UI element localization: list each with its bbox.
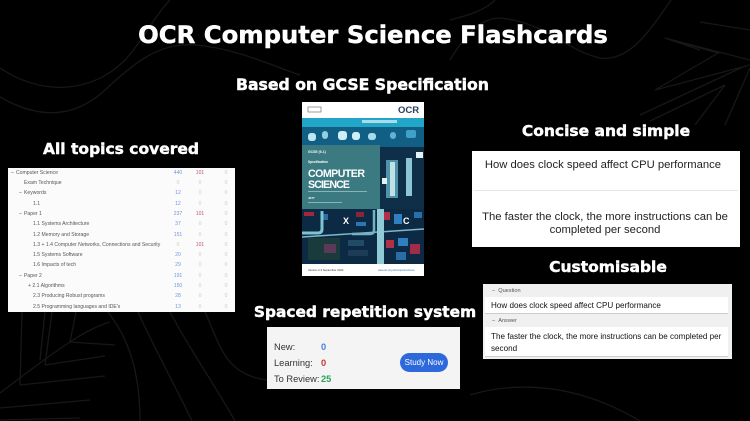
card question: How does clock speed affect CPU performance bbox=[485, 159, 721, 171]
panel: specification cover bbox=[302, 102, 424, 276]
card answer bbox=[482, 211, 728, 236]
cover text: GCSE (9-1) bbox=[308, 150, 326, 154]
row: 1.1 Systems Architecture: 37 bbox=[175, 221, 181, 227]
title: OCR Computer Science Flashcards bbox=[138, 20, 608, 49]
footer text: Version 2.3 September 2024 bbox=[308, 268, 344, 272]
row: Computer Science bbox=[11, 170, 228, 176]
row: 1.6 Impacts of tech: 29 bbox=[175, 262, 181, 268]
row: Paper 1: 0 bbox=[225, 211, 227, 217]
row: 1.1 Systems Architecture bbox=[33, 221, 228, 227]
row: Paper 1: Paper 1 bbox=[24, 211, 42, 217]
row: 2.1 Algorithms: 0 bbox=[225, 283, 227, 289]
label and count: new: 0 bbox=[321, 342, 326, 352]
row: Exam Technique: 0 bbox=[177, 180, 179, 186]
row: Computer Science: 0 bbox=[225, 170, 227, 176]
row: 2.1 Algorithms bbox=[28, 283, 228, 289]
cover text: COMPUTER bbox=[308, 168, 365, 180]
label and count: to review: To Review: bbox=[274, 374, 319, 384]
row: 1.3 + 1.4: 101 bbox=[196, 242, 204, 248]
heading: spaced repetition: Spaced repetition system bbox=[254, 303, 476, 321]
field: answer bbox=[485, 327, 728, 357]
row: Paper 2: 0 bbox=[199, 273, 201, 279]
label and count: learning: 0 bbox=[321, 358, 326, 368]
row: 1.6 Impacts of tech bbox=[33, 262, 228, 268]
row: Paper 2: – bbox=[19, 273, 22, 279]
row: 1.2 Memory and Storage: 1.2 Memory and Storage bbox=[33, 232, 89, 238]
row: Exam Technique: 0 bbox=[225, 180, 227, 186]
row: 1.5 Systems Software: 1.5 Systems Software bbox=[33, 252, 83, 258]
cover text bbox=[308, 150, 365, 200]
row: Exam Technique bbox=[24, 180, 228, 186]
row: 2.3 Producing Robust programs bbox=[33, 293, 228, 299]
row: 1.1: 1.1 bbox=[33, 201, 40, 207]
cover text: SCIENCE bbox=[308, 179, 350, 191]
row: Paper 2: Paper 2 bbox=[24, 273, 42, 279]
row: 2.5 Programming languages: 2.5 Programming languages and IDE's bbox=[33, 304, 120, 310]
row: Paper 1: – bbox=[19, 211, 22, 217]
cover text: Specification bbox=[308, 160, 328, 164]
row: Keywords: Keywords bbox=[24, 190, 46, 196]
row: 1.5 Systems Software: 0 bbox=[199, 252, 201, 258]
row: 1.1: 12 bbox=[175, 201, 181, 207]
row: 2.3 Producing Robust programs: 2.3 Producing Robust programs bbox=[33, 293, 105, 299]
row: 1.1: 0 bbox=[225, 201, 227, 207]
row: 1.6 Impacts of tech: 1.6 Impacts of tech bbox=[33, 262, 76, 268]
row: 1.3 + 1.4 bbox=[33, 242, 228, 248]
key letters: X bbox=[343, 216, 349, 226]
logo box bbox=[308, 107, 321, 112]
row: 1.5 Systems Software: 0 bbox=[225, 252, 227, 258]
row: Keywords: 0 bbox=[199, 190, 201, 196]
row: 1.6 Impacts of tech: 0 bbox=[199, 262, 201, 268]
panel: card editor bbox=[483, 284, 732, 359]
row: Exam Technique: 0 bbox=[199, 180, 201, 186]
row: Keywords: 0 bbox=[225, 190, 227, 196]
field: question: How does clock speed affect CPU performance bbox=[491, 301, 661, 310]
row: 1.2 Memory and Storage: 151 bbox=[174, 232, 182, 238]
field label: answer: – Answer bbox=[492, 318, 517, 324]
field: question bbox=[485, 297, 728, 314]
row: 2.3 Producing Robust programs: 0 bbox=[199, 293, 201, 299]
row: 1.3 + 1.4: 0 bbox=[177, 242, 179, 248]
cover text: J277 bbox=[308, 196, 315, 200]
panel: specification cover: www.ocr.org.uk/computerscience bbox=[378, 269, 415, 272]
OCR logo: OCR bbox=[398, 105, 419, 116]
heading: all topics covered: All topics covered bbox=[43, 140, 199, 158]
heading: concise and simple: Concise and simple bbox=[522, 122, 690, 140]
row: Paper 1 bbox=[19, 211, 228, 217]
row: 1.5 Systems Software: 20 bbox=[175, 252, 181, 258]
row: Keywords: – bbox=[19, 190, 22, 196]
label and count: to review: 25 bbox=[321, 374, 331, 384]
heading: customisable: Customisable bbox=[549, 258, 667, 276]
card divider bbox=[474, 190, 738, 191]
row: 1.5 Systems Software bbox=[33, 252, 228, 258]
row: 2.5 Programming languages bbox=[33, 304, 228, 310]
row: Computer Science: 440 bbox=[174, 170, 182, 176]
panel: topics table bbox=[8, 168, 235, 312]
teal title panel bbox=[302, 145, 380, 209]
row: Computer Science: 101 bbox=[196, 170, 204, 176]
row: 2.1 Algorithms: 150 bbox=[174, 283, 182, 289]
row: Exam Technique: Exam Technique bbox=[24, 180, 62, 186]
row: Computer Science: – bbox=[11, 170, 14, 176]
icon: cover photograph bbox=[302, 118, 424, 264]
row: 1.3 + 1.4: 1.3 + 1.4 Computer Networks, Connections and Security bbox=[33, 242, 160, 248]
row: Computer Science: Computer Science bbox=[16, 170, 58, 176]
panel: study counts bbox=[267, 327, 460, 389]
field label: question: – Question bbox=[492, 288, 521, 294]
panel: specification cover: C bbox=[403, 216, 410, 226]
row: 1.1 Systems Architecture: 1.1 Systems Architecture bbox=[33, 221, 89, 227]
row: 1.2 Memory and Storage: 0 bbox=[225, 232, 227, 238]
row: Keywords: 12 bbox=[175, 190, 181, 196]
row: Paper 1: 101 bbox=[196, 211, 204, 217]
row: Paper 2: 0 bbox=[225, 273, 227, 279]
card answer: completed per second bbox=[550, 224, 660, 236]
row: 1.2 Memory and Storage: 0 bbox=[199, 232, 201, 238]
button: study now bbox=[400, 353, 448, 372]
panel: flashcard bbox=[472, 151, 740, 247]
row: Paper 2: 191 bbox=[174, 273, 182, 279]
row: 1.1 Systems Architecture: 0 bbox=[199, 221, 201, 227]
row: 2.1 Algorithms: 0 bbox=[199, 283, 201, 289]
row: 1.1 Systems Architecture: 0 bbox=[225, 221, 227, 227]
row: 2.5 Programming languages: 0 bbox=[199, 304, 201, 310]
label and count: learning: Learning: bbox=[274, 358, 313, 368]
label and count: new bbox=[274, 342, 326, 352]
card answer: The faster the clock, the more instructions can be bbox=[482, 211, 728, 223]
heading: based on specification: Based on GCSE Specification bbox=[236, 75, 489, 94]
row: 2.3 Producing Robust programs: 0 bbox=[225, 293, 227, 299]
button: study now: Study Now bbox=[405, 358, 443, 367]
row: 2.5 Programming languages: 13 bbox=[175, 304, 181, 310]
row: 1.3 + 1.4: 0 bbox=[225, 242, 227, 248]
row: Keywords bbox=[19, 190, 228, 196]
row: Paper 1: 237 bbox=[174, 211, 182, 217]
row: 1.1 bbox=[33, 201, 228, 207]
row: 2.5 Programming languages: 0 bbox=[225, 304, 227, 310]
row: 1.2 Memory and Storage bbox=[33, 232, 228, 238]
row: 2.3 Producing Robust programs: 28 bbox=[175, 293, 181, 299]
row: Paper 2 bbox=[19, 273, 228, 279]
label and count: new: New: bbox=[274, 342, 295, 352]
row: 1.6 Impacts of tech: 0 bbox=[225, 262, 227, 268]
field: answer: The faster the clock, the more instructions can be completed per second bbox=[491, 332, 721, 353]
row: 2.1 Algorithms: + 2.1 Algorithms bbox=[28, 283, 65, 289]
row: 1.1: 0 bbox=[199, 201, 201, 207]
